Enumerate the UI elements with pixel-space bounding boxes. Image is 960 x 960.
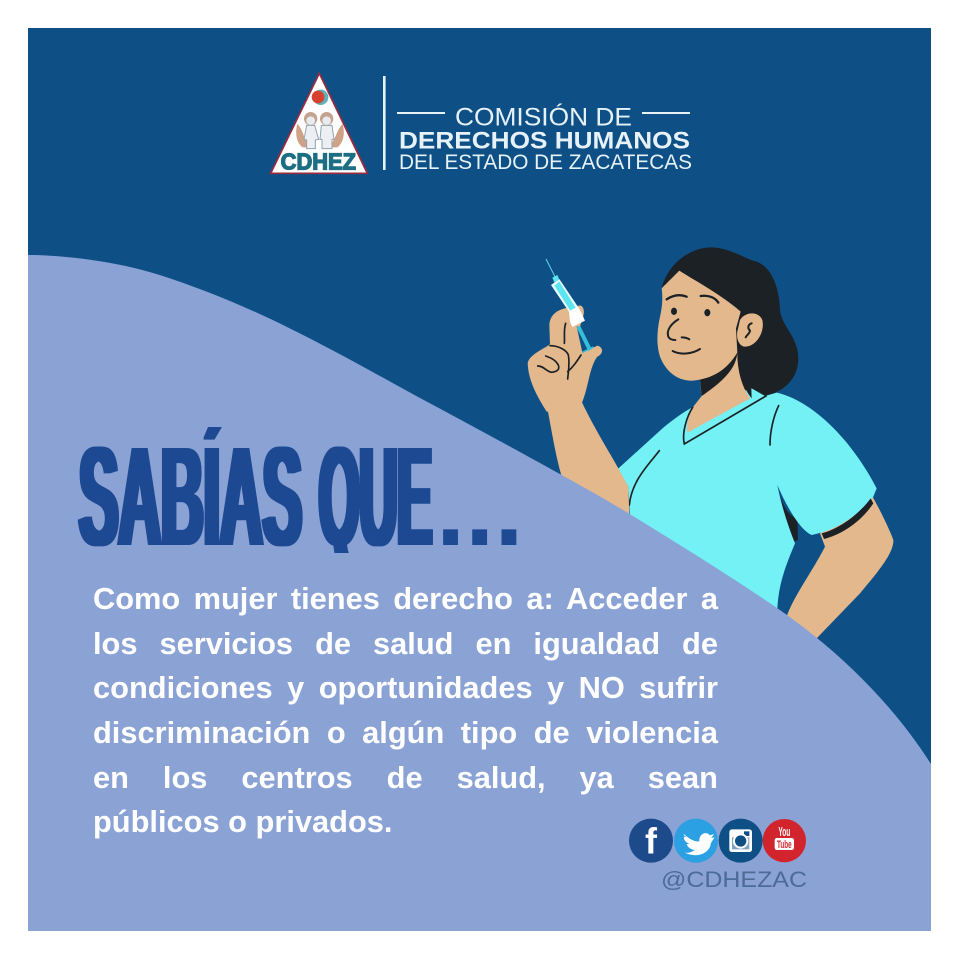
body text: los servicios de salud en igualdad de bbox=[93, 626, 718, 661]
syringe needle bbox=[546, 259, 555, 277]
facial features bbox=[667, 295, 752, 354]
finger lines bbox=[538, 323, 581, 379]
icon: youtube: You bbox=[778, 825, 790, 839]
body text: Como mujer tienes derecho a: Acceder a bbox=[93, 581, 718, 616]
syringe plunger bbox=[578, 327, 590, 350]
logo: CDHEZ triangle: CDHEZ bbox=[281, 149, 356, 175]
wave: light blue panel bbox=[28, 255, 931, 931]
body text bbox=[93, 581, 718, 839]
heading: Sabías que: QUE bbox=[319, 417, 432, 575]
logo wordmark: DEL ESTADO DE ZACATECAS bbox=[399, 151, 692, 174]
logo divider bbox=[383, 76, 386, 170]
finger tip bbox=[575, 306, 584, 327]
head group bbox=[657, 271, 763, 433]
social icons bbox=[629, 819, 806, 863]
neck shadow bbox=[700, 353, 737, 396]
heading: Sabías que: ... bbox=[436, 451, 524, 568]
shirt seams bbox=[629, 396, 779, 505]
logo wordmark: COMISIÓN DE bbox=[455, 102, 632, 132]
hand bbox=[528, 308, 602, 415]
logo wordmark bbox=[397, 102, 692, 174]
icon: youtube bbox=[763, 819, 806, 862]
body text: discriminación o algún tipo de violencia bbox=[93, 715, 718, 750]
social handle: @CDHEZAC bbox=[661, 867, 807, 892]
syringe body bbox=[551, 279, 579, 312]
face bbox=[657, 271, 741, 381]
heading: Sabías que bbox=[78, 427, 516, 553]
armpit shadow bbox=[777, 483, 798, 542]
body text: condiciones y oportunidades y NO sufrir bbox=[93, 670, 718, 705]
body text: en los centros de salud, ya sean bbox=[93, 760, 718, 795]
icon: instagram bbox=[719, 819, 763, 863]
sleeve shadow bbox=[822, 498, 873, 539]
hair bbox=[662, 247, 798, 399]
shirt bbox=[617, 388, 877, 617]
icon: facebook bbox=[629, 819, 673, 863]
left arm bbox=[547, 402, 629, 515]
neck and chest bbox=[687, 353, 750, 433]
logo: CDHEZ triangle bbox=[271, 73, 367, 175]
syringe flange bbox=[569, 307, 585, 327]
ear bbox=[737, 313, 763, 347]
body text: públicos o privados. bbox=[93, 804, 392, 839]
right arm bbox=[787, 495, 893, 638]
icon: facebook: f bbox=[645, 820, 658, 861]
icon: twitter bbox=[674, 819, 718, 863]
illustration: nurse with syringe bbox=[528, 247, 893, 638]
icon: youtube: Tube bbox=[777, 839, 792, 851]
heading: Sabías que: SABÍAS bbox=[79, 417, 302, 575]
hair strand bbox=[737, 350, 752, 398]
hand and syringe bbox=[528, 259, 602, 415]
logo wordmark: DERECHOS HUMANOS bbox=[399, 128, 690, 154]
